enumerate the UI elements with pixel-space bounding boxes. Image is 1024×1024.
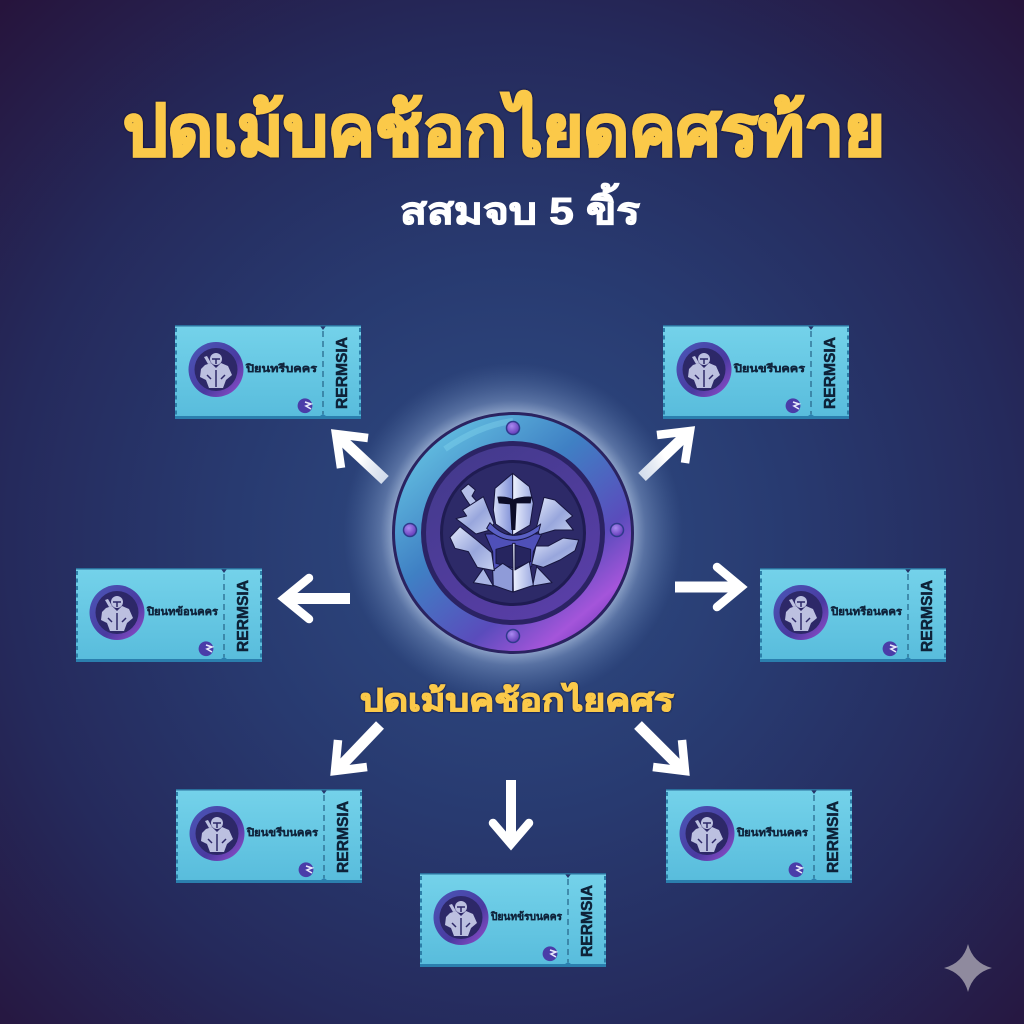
ticket: middle left [76, 568, 262, 662]
ticket: top left [175, 325, 361, 419]
ticket: bottom centre: RERMSIA [579, 885, 596, 957]
arrow: to bottom centre ticket [493, 780, 529, 844]
ticket: top left: ปิยนทรีบคคร [244, 362, 317, 375]
title: ปดเม้บคช้อกไยดคศรท้าย [123, 90, 885, 170]
ticket: bottom centre [420, 873, 606, 967]
ticket: bottom left [176, 789, 362, 883]
ticket: top right: RERMSIA [822, 337, 839, 409]
ticket: middle right: RERMSIA [919, 580, 936, 652]
medallion caption: ปดเม้บคช้อกไยคศร [360, 682, 674, 718]
rivets [404, 422, 624, 642]
subtitle: สสมจบ 5 ขิ้ร [400, 183, 641, 233]
arrow: to top right ticket [642, 431, 690, 477]
ticket: middle left: RERMSIA [235, 580, 252, 652]
ticket: middle right [760, 568, 946, 662]
ticket: top right: ปิยนขรีบคคร [732, 362, 805, 375]
arrow: to bottom right ticket [638, 725, 685, 771]
ticket: bottom right [666, 789, 852, 883]
arrow: to middle left ticket [284, 578, 350, 619]
central knight medallion [343, 363, 683, 703]
arrow: to bottom left ticket [335, 725, 380, 771]
ticket: bottom right: ปิยนทรีบนคคร [736, 826, 808, 839]
ticket: bottom left: ปิยนขรีบนคคร [246, 826, 318, 839]
ticket: bottom right: RERMSIA [825, 801, 842, 873]
ticket: top left: RERMSIA [334, 337, 351, 409]
icon: sparkle [944, 944, 992, 992]
ticket: middle right: ปิยนทรีอนคคร [830, 605, 902, 618]
ticket: bottom left: RERMSIA [335, 801, 352, 873]
ticket: middle left: ปิยนทข้อนคคร [146, 605, 218, 618]
arrow: to top left ticket [336, 434, 385, 480]
ticket: bottom centre: ปิยนทข้รบนคคร [490, 910, 562, 923]
ticket: top right [663, 325, 849, 419]
icon: knight [450, 473, 579, 592]
arrow: to middle right ticket [675, 567, 741, 607]
